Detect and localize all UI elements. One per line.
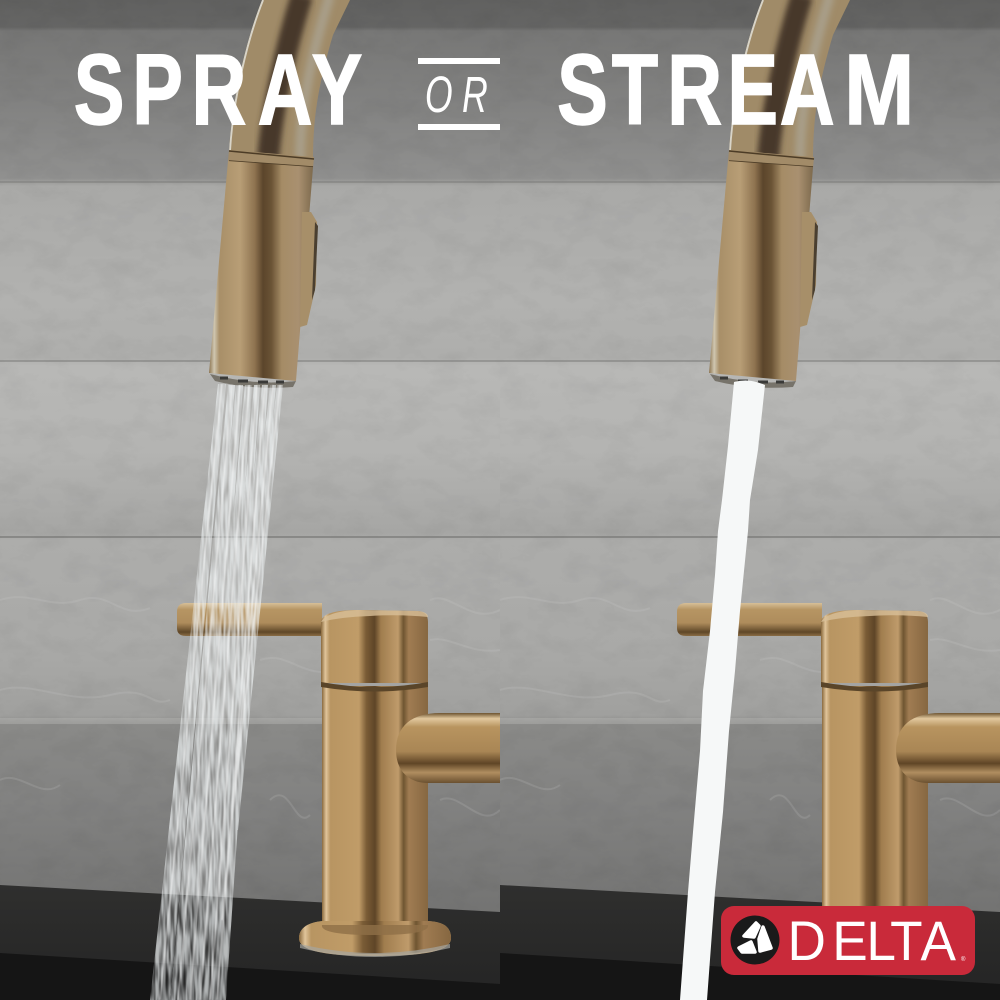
panel: stream side background with faucet [500,0,1000,1000]
icon: Delta tri-lobed mark [730,916,780,964]
spray water highlights [160,384,280,1000]
title: STREAM: STREA [557,34,835,145]
panel: spray side background with faucet [0,0,500,1000]
title: SPRAY: SPRAY [74,34,362,145]
spray water streams [150,384,283,1000]
logo: Delta badge [721,906,975,975]
logo: Delta badge: ® [961,956,966,963]
title: OR with bars: OR [425,67,488,124]
title: OR with bars [418,58,500,130]
stream water [680,381,765,1000]
title: STREAM: M [844,33,914,146]
wordmark: DELTA [788,910,957,972]
